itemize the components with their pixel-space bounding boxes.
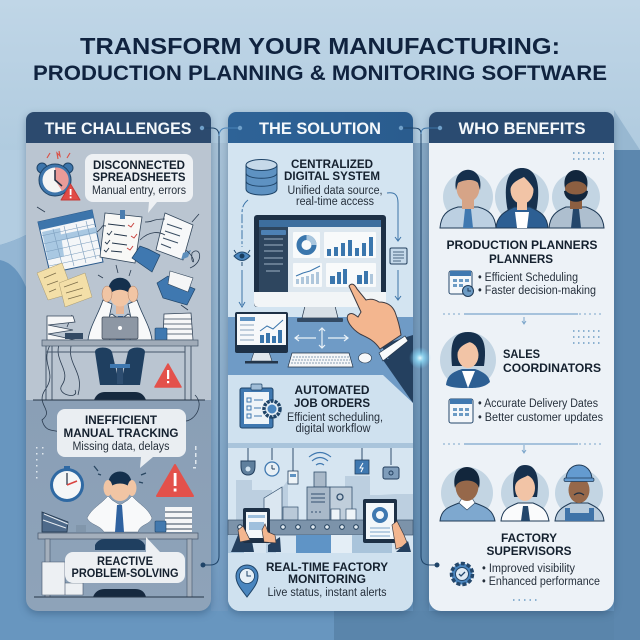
icon: gauge <box>265 448 279 476</box>
text: centralized digital system: CENTRALIZED <box>291 159 373 171</box>
list: planner benefits <box>478 272 596 297</box>
section: factory illustration <box>228 443 413 553</box>
icon: wifi <box>309 452 331 465</box>
callout: disconnected spreadsheets <box>85 154 193 213</box>
tablet left with hands <box>231 508 281 552</box>
wires and stress marks <box>37 207 200 432</box>
text: real-time factory monitoring: REAL-TIME FACTORY <box>266 562 388 574</box>
callout: reactive problem-solving: PROBLEM-SOLVING <box>72 568 179 580</box>
section: real-time factory monitoring <box>228 553 413 611</box>
tablet right with hand <box>363 499 411 552</box>
arrows: cross <box>295 328 348 348</box>
icon: calendar with clock <box>449 271 474 296</box>
divider arrow <box>443 314 601 324</box>
header: who benefits: WHO BENEFITS <box>458 120 586 138</box>
text: centralized digital system: Unified data source, <box>288 185 382 197</box>
heading: sales coordinators <box>503 349 601 375</box>
list: sales benefits: • Better customer updates <box>478 412 603 424</box>
person: worker with hard hat <box>555 465 604 521</box>
text: real-time factory monitoring: MONITORING <box>288 574 366 586</box>
text: centralized digital system: real-time access <box>296 196 374 208</box>
heading: production planners <box>446 240 598 266</box>
list: supervisor benefits: • Improved visibility <box>482 563 575 575</box>
person: bearded planner <box>549 170 604 228</box>
heading: factory supervisors: SUPERVISORS <box>486 546 572 558</box>
header: the solution <box>228 112 413 143</box>
band behind monitor <box>228 317 413 403</box>
icon: eye <box>234 250 250 266</box>
header: the solution: THE SOLUTION <box>259 120 381 138</box>
icon: calendar <box>449 399 473 423</box>
icon: monitor sensor <box>383 448 399 479</box>
icon: alarm clock <box>37 151 80 200</box>
decorative dots bottom <box>513 599 540 601</box>
line chart card <box>293 263 322 287</box>
icon: checklist note <box>100 210 142 263</box>
people: production planners <box>440 168 604 228</box>
icon: power box <box>355 448 369 474</box>
list: supervisor benefits: • Enhanced performance <box>482 576 600 588</box>
decorative dots <box>573 153 604 343</box>
hand pointing <box>347 284 413 403</box>
factory machines <box>283 472 356 520</box>
list: sales benefits <box>478 398 603 424</box>
panel: the challenges <box>26 112 211 611</box>
heading: production planners: PRODUCTION PLANNERS <box>446 240 598 252</box>
lower desk <box>34 533 204 597</box>
callout: disconnected spreadsheets: SPREADSHEETS <box>92 172 186 184</box>
icon: sensor box <box>288 448 298 484</box>
icon: sticky notes <box>37 263 92 307</box>
donut card <box>293 232 320 258</box>
callout: inefficient manual tracking <box>57 409 186 468</box>
list: planner benefits: • Faster decision-making <box>478 285 596 297</box>
icon: spreadsheet <box>38 210 103 273</box>
callout: reactive problem-solving <box>65 537 185 583</box>
laptop <box>102 317 138 339</box>
list: supervisor benefits <box>482 563 600 588</box>
paper stacks and mug <box>47 313 193 340</box>
glow node <box>409 347 431 369</box>
heading: sales coordinators: COORDINATORS <box>503 363 601 375</box>
title: PRODUCTION PLANNING & MONITORING SOFTWARE <box>33 61 607 85</box>
small monitor <box>235 312 288 364</box>
conveyor belt <box>228 520 413 553</box>
connector: challenges to solution <box>200 126 242 568</box>
callout: disconnected spreadsheets: DISCONNECTED <box>93 160 185 172</box>
connector: solution to benefits <box>399 126 442 568</box>
section: automated job orders <box>228 358 413 443</box>
bar chart card <box>326 263 376 287</box>
icon: document <box>156 213 193 260</box>
heading: production planners: PLANNERS <box>489 254 553 266</box>
header: the challenges: THE CHALLENGES <box>44 120 192 138</box>
list: planner benefits: • Efficient Scheduling <box>478 272 578 284</box>
heading: sales coordinators: SALES <box>503 349 540 361</box>
icon: clipboard with gear <box>240 384 280 428</box>
icon: location clock <box>236 565 258 597</box>
heading: factory supervisors <box>486 533 572 558</box>
text: automated job orders: Efficient scheduling, <box>287 412 383 424</box>
callout: reactive problem-solving: REACTIVE <box>97 556 153 568</box>
person: male planner <box>440 170 496 228</box>
desk with chair <box>33 340 205 400</box>
title <box>33 33 607 85</box>
arrows around monitor <box>239 193 401 307</box>
icon: report <box>390 248 407 264</box>
icon: gear with check <box>452 564 472 584</box>
header: who benefits <box>429 112 614 143</box>
title: TRANSFORM YOUR MANUFACTURING: <box>80 33 560 59</box>
person: supervisor one <box>440 467 495 521</box>
binders, papers and mug <box>42 507 192 532</box>
text: automated job orders: AUTOMATED <box>294 385 370 397</box>
text: centralized digital system: DIGITAL SYSTEM <box>284 171 380 183</box>
monitor dashboard <box>254 215 386 322</box>
worker at desk <box>88 278 152 340</box>
callout: inefficient manual tracking: INEFFICIENT <box>85 415 157 427</box>
text: centralized digital system <box>284 159 382 208</box>
heading: factory supervisors: FACTORY <box>501 533 557 545</box>
list: sales benefits: • Accurate Delivery Dates <box>478 398 598 410</box>
text: automated job orders: digital workflow <box>296 423 371 435</box>
panel: the solution <box>228 112 413 611</box>
icon: warning <box>155 364 181 387</box>
icon: large warning <box>157 465 193 496</box>
person: female planner <box>495 168 549 228</box>
divider arrow <box>443 444 601 453</box>
keyboard and mouse <box>288 353 372 367</box>
icon: folders <box>132 246 195 305</box>
text: real-time factory monitoring <box>266 562 388 599</box>
people: factory supervisors <box>440 465 604 521</box>
header: the challenges <box>26 112 211 143</box>
icon: camera <box>241 448 255 475</box>
icon: database <box>246 160 277 195</box>
stressed worker <box>87 466 152 532</box>
text: real-time factory monitoring: Live status, instant alerts <box>268 587 387 599</box>
callout: disconnected spreadsheets: Manual entry, errors <box>92 185 186 197</box>
decorative dots left <box>36 446 196 478</box>
callout: inefficient manual tracking: Missing data, delays <box>72 441 170 453</box>
callout: inefficient manual tracking: MANUAL TRACKING <box>64 428 179 440</box>
bar card <box>324 232 376 258</box>
icon: stopwatch <box>50 466 84 502</box>
panel: who benefits <box>429 112 614 611</box>
text: automated job orders: JOB ORDERS <box>294 398 370 410</box>
person: sales coordinator <box>440 332 496 388</box>
person: supervisor two <box>501 465 549 521</box>
text: automated job orders <box>287 385 383 435</box>
